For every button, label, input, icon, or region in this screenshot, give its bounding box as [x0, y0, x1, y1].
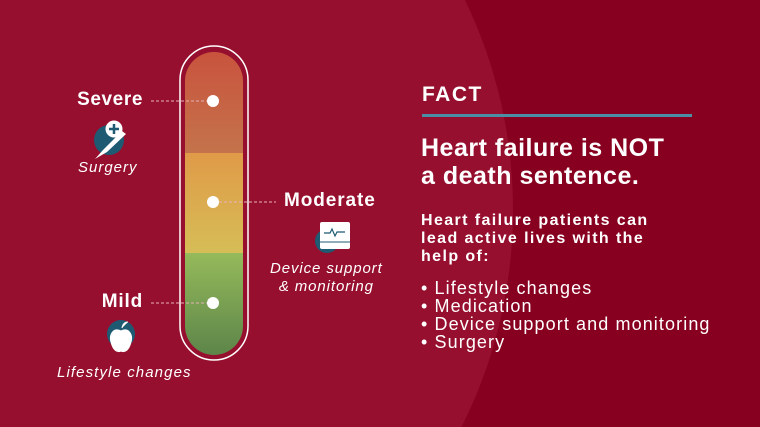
- subtext: [421, 212, 649, 265]
- label: Severe: Severe: [77, 89, 143, 110]
- caption: Surgery: Surgery: [78, 159, 138, 176]
- caption: Lifestyle: Lifestyle changes: [57, 364, 192, 381]
- teal rule: [422, 114, 692, 117]
- bullet list: • Medication: [421, 296, 533, 316]
- bullet list: [421, 278, 711, 352]
- heading: FACT: FACT: [422, 83, 483, 106]
- headline: a death sentence.: [421, 162, 639, 190]
- icon: device: [315, 222, 350, 253]
- label: Mild: Mild: [102, 291, 143, 312]
- headline: Heart failure is NOT: [421, 134, 664, 162]
- subtext: lead active lives with the: [421, 230, 644, 247]
- icon: apple: [107, 320, 135, 352]
- caption: device: [270, 260, 383, 295]
- caption: device: Device support: [270, 260, 383, 277]
- subtext: Heart failure patients can: [421, 212, 649, 229]
- icon: surgery: [94, 120, 126, 159]
- label: Moderate: Moderate: [284, 190, 376, 211]
- bullet list: • Surgery: [421, 332, 505, 352]
- subtext: help of:: [421, 248, 490, 265]
- bullet list: • Device support and monitoring: [421, 314, 711, 334]
- caption: device: & monitoring: [279, 278, 374, 295]
- headline: [421, 134, 664, 190]
- bullet list: • Lifestyle changes: [421, 278, 592, 298]
- severity scale: [94, 45, 350, 361]
